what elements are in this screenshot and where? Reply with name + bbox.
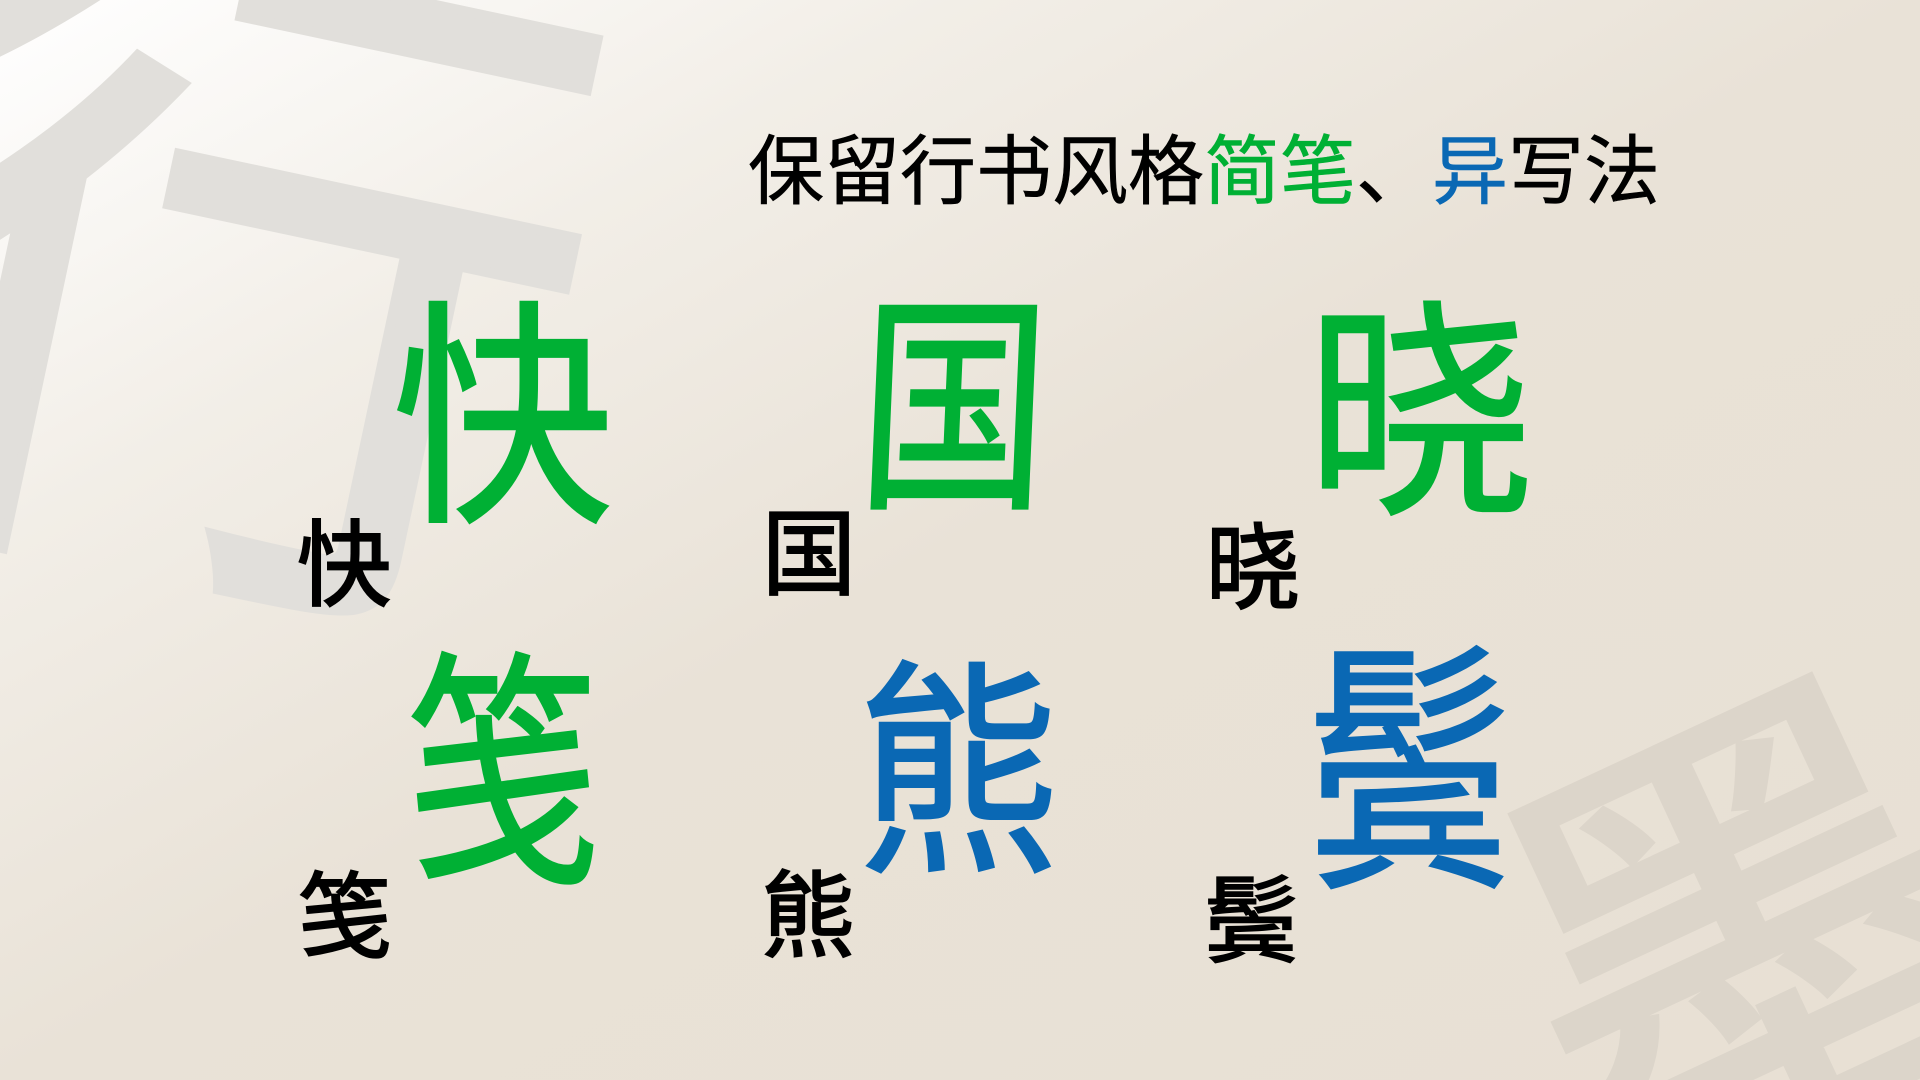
calligraphic glyph: 国: 国 <box>854 281 1054 539</box>
standard glyph: 笺: 笺 <box>298 865 392 970</box>
standard glyph: 熊: 熊 <box>761 864 855 969</box>
standard glyph: 国: 国 <box>762 502 856 607</box>
glyph pair: 熊 <box>761 647 1060 969</box>
calligraphic glyph: 快: 快 <box>392 286 613 554</box>
title: 保留行书风格简笔、异写法 <box>748 130 1660 215</box>
standard glyph: 快: 快 <box>297 513 391 618</box>
glyph pair: 快 <box>297 286 613 618</box>
calligraphic glyph: 鬓: 鬓 <box>1306 629 1512 922</box>
glyph pair: 晓 <box>1206 285 1534 621</box>
glyph pair: 国 <box>762 281 1054 607</box>
standard glyph: 鬓: 鬓 <box>1204 869 1298 974</box>
calligraphic glyph: 笺: 笺 <box>406 637 601 918</box>
calligraphic glyph: 熊: 熊 <box>856 647 1060 903</box>
glyph pair: 笺 <box>298 637 601 970</box>
standard glyph: 晓: 晓 <box>1206 516 1300 621</box>
glyph pair: 鬓 <box>1204 629 1512 974</box>
calligraphic glyph: 晓: 晓 <box>1306 285 1534 545</box>
